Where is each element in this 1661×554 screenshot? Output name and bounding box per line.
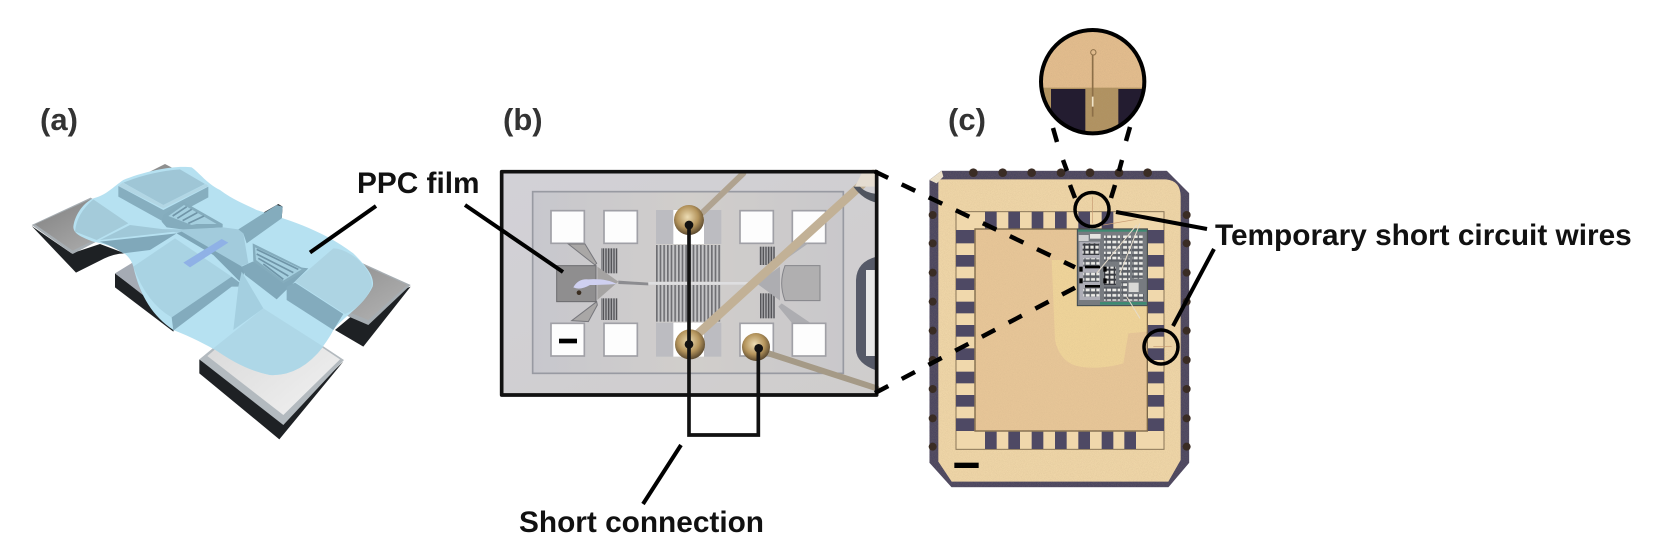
inset photo — [1043, 32, 1142, 132]
zoom dashed lines: chip to inset — [1053, 127, 1130, 198]
inset ring — [1041, 30, 1144, 133]
panel c: packaged chip photo — [929, 168, 1191, 487]
leader line: wires label to top circle — [1116, 212, 1207, 229]
bonding wires — [697, 173, 877, 388]
small side combs — [601, 247, 775, 320]
short connection wire — [685, 221, 763, 435]
zoom dashed lines: panel b to chip — [875, 171, 1075, 393]
right side package edge — [853, 173, 877, 371]
inset: magnified wire — [1040, 30, 1147, 136]
PPC flake on left electrode — [557, 266, 617, 302]
circle: top wire — [1075, 192, 1109, 226]
right contact pad — [287, 250, 411, 347]
upper contact pad — [123, 164, 210, 208]
leader line: PPC film to panel b — [465, 205, 563, 272]
leader line: short connection — [643, 445, 681, 504]
label: Temporary short circuit wires: Temporary short circuit wires — [1215, 219, 1632, 252]
label: PPC film: PPC film — [357, 167, 480, 200]
bond fingers — [956, 212, 1164, 449]
leader line: wires label to right circle — [1173, 249, 1214, 326]
scale bar — [559, 339, 577, 343]
left contact pad — [32, 198, 132, 273]
chip carrier body — [929, 171, 1189, 487]
right electrode — [782, 266, 820, 301]
panel label: (b): (b) — [503, 102, 543, 137]
leader line: PPC film to panel a — [310, 206, 376, 252]
label: Short connection: Short connection — [519, 506, 764, 539]
microchip die — [1077, 223, 1147, 318]
circle: right wire — [1144, 330, 1178, 364]
scale bar — [954, 463, 979, 468]
blue flake — [183, 239, 228, 267]
central electrodes — [656, 210, 721, 357]
panel b: micrograph of device — [502, 172, 877, 435]
micrograph background — [502, 172, 877, 395]
PPC film — [73, 167, 373, 375]
die cavity — [975, 229, 1147, 431]
gold wire bonds — [674, 205, 770, 361]
panel label: (a): (a) — [40, 102, 78, 137]
device structures under film — [75, 169, 372, 375]
carrier edge pins — [929, 168, 1191, 451]
small wire details — [1092, 197, 1172, 347]
centre contact pad — [115, 237, 233, 332]
substrate frame — [533, 192, 843, 373]
lower contact pad — [199, 307, 344, 439]
cavity texture — [975, 229, 1147, 431]
dark arm tip behind film — [263, 204, 283, 218]
frame — [502, 172, 877, 395]
channel and traces — [568, 243, 810, 323]
adhesive patch — [1052, 260, 1147, 368]
panel a: 3D device with PPC film — [32, 164, 411, 439]
panel label: (c): (c) — [948, 102, 986, 137]
white bond pads — [551, 211, 826, 356]
recessed bond frame — [956, 212, 1164, 449]
